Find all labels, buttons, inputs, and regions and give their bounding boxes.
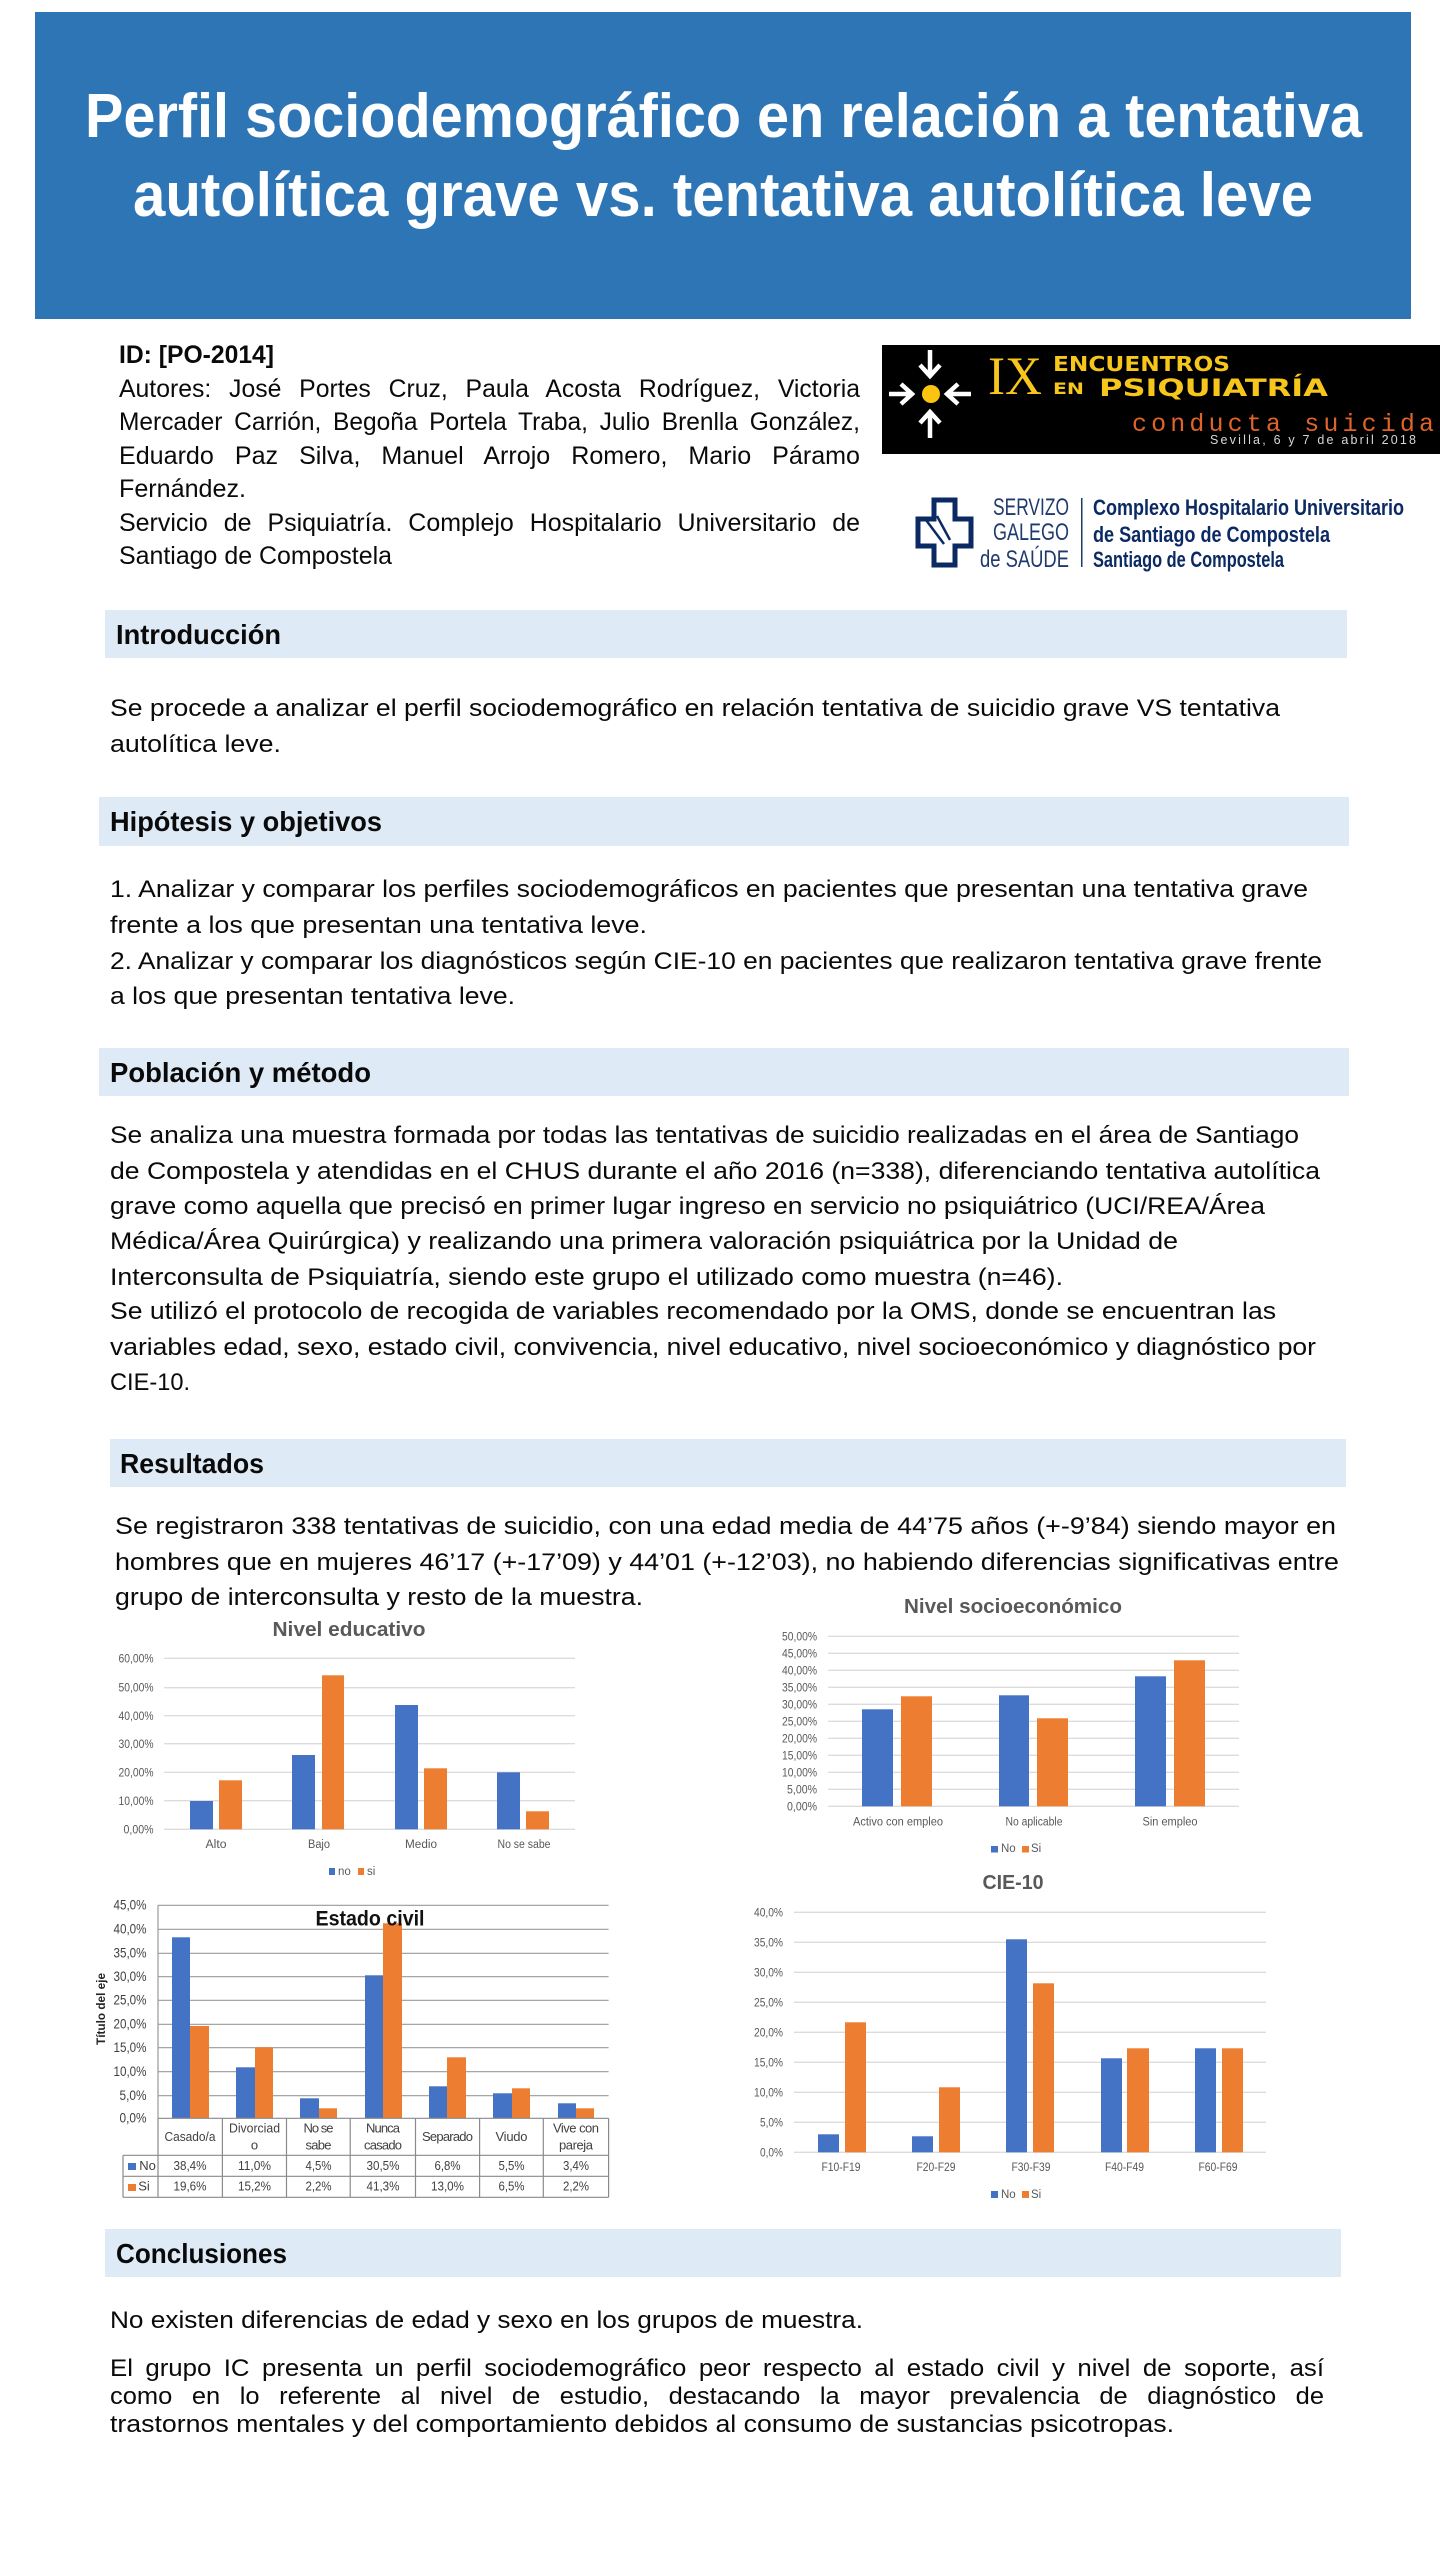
chart: nivel socioeconómico: 40,00% xyxy=(782,1666,817,1678)
panel: introducción: Introducción xyxy=(116,619,281,650)
chart: nivel educativo: 40,00% xyxy=(118,1711,154,1723)
chart: nivel educativo: 50,00% xyxy=(118,1682,154,1694)
chart: nivel educativo xyxy=(118,1619,575,1878)
title banner xyxy=(35,12,1411,319)
panel: población y método: Se analiza una muestra formada por todas las tentativas de suicidio realizadas en el área de Santiago xyxy=(110,1122,1299,1149)
chart: nivel socioeconómico: 35,00% xyxy=(782,1682,817,1694)
data table: Viudo xyxy=(496,2129,528,2144)
data table xyxy=(123,2118,609,2197)
panel: población y método: Médica/Área Quirúrgica) y realizando una primera valoración psiquiátrica por la Unidad de xyxy=(110,1228,1178,1255)
chart: CIE-10: 20,0% xyxy=(754,2028,783,2040)
data table: 6,5% xyxy=(498,2179,525,2194)
icon: converging arrows xyxy=(889,350,971,438)
chart: nivel educativo: Medio xyxy=(405,1839,437,1851)
data table: 2,2% xyxy=(306,2179,332,2194)
panel: conclusiones: Conclusiones xyxy=(116,2238,287,2269)
logo: IX Encuentros en Psiquiatría: conducta suicida xyxy=(1132,410,1434,439)
chart: nivel educativo: No se sabe xyxy=(498,1839,550,1851)
data table: 4,5% xyxy=(306,2158,332,2173)
chart: nivel socioeconómico: 50,00% xyxy=(782,1632,817,1644)
chart: estado civil: 0,0% xyxy=(120,2110,146,2126)
data table: 3,4% xyxy=(563,2158,589,2173)
data table: 13,0% xyxy=(431,2179,464,2194)
chart: estado civil: Estado civil xyxy=(316,1908,424,1931)
data table: 15,2% xyxy=(238,2179,271,2194)
panel: hipótesis y objetivos: a los que presentan tentativa leve. xyxy=(110,983,515,1010)
panel: hipótesis y objetivos: frente a los que presentan una tentativa leve. xyxy=(110,912,647,939)
logo: IX Encuentros en Psiquiatría xyxy=(882,345,1440,454)
panel: resultados: Resultados xyxy=(120,1448,264,1479)
data table: Nunca xyxy=(366,2120,401,2135)
panel: resultados xyxy=(110,1439,1346,1611)
data table: o xyxy=(251,2138,258,2153)
data table: Divorciad xyxy=(229,2120,280,2135)
data table: Vive con xyxy=(553,2120,599,2135)
chart: nivel socioeconómico: Si xyxy=(1031,1843,1041,1855)
panel: población y método: grave como aquella que precisó en primer lugar ingreso en servicio no psiquiátrico (UCI/REA/Área xyxy=(110,1193,1265,1220)
bars xyxy=(172,1923,594,2118)
data table: 6,8% xyxy=(434,2158,461,2173)
chart: nivel socioeconómico: Sin empleo xyxy=(1142,1817,1198,1829)
chart: nivel educativo: Nivel educativo xyxy=(272,1619,426,1641)
chart: estado civil: 40,0% xyxy=(114,1922,146,1936)
chart: nivel educativo: Alto xyxy=(206,1839,226,1851)
panel: introducción xyxy=(105,610,1347,758)
chart: CIE-10: F10-F19 xyxy=(822,2162,860,2174)
panel: población y método: de Compostela y atendidas en el CHUS durante el año 2016 (n=338), diferenciando tentativa autolítica xyxy=(110,1158,1320,1185)
title banner: autolítica grave vs. tentativa autolítica leve xyxy=(133,161,1313,230)
data table: No se xyxy=(304,2120,334,2135)
bars xyxy=(190,1675,549,1829)
logo: Servizo Galego de Saúde / CHUS xyxy=(918,494,1404,573)
chart: CIE-10: F20-F29 xyxy=(916,2162,956,2174)
chart: estado civil: 10,0% xyxy=(114,2064,146,2079)
chart: nivel socioeconómico: 20,00% xyxy=(782,1734,817,1746)
chart: estado civil xyxy=(94,1898,609,2197)
icon: cross xyxy=(918,500,971,565)
authors block: Santiago de Compostela xyxy=(119,542,392,570)
chart: nivel educativo: Bajo xyxy=(308,1839,330,1851)
data table: 5,5% xyxy=(498,2158,525,2173)
data table: 2,2% xyxy=(563,2179,589,2194)
chart: nivel socioeconómico: 25,00% xyxy=(782,1716,817,1728)
chart: nivel educativo: 30,00% xyxy=(118,1739,154,1751)
logo: Servizo Galego de Saúde / CHUS: de Santiago de Compostela xyxy=(1093,522,1330,547)
panel: resultados: hombres que en mujeres 46’17 (+-17’09) y 44’01 (+-12’03), no habiendo diferencias significativas entre xyxy=(115,1549,1339,1576)
panel: población y método: CIE-10. xyxy=(110,1369,190,1396)
data table: No xyxy=(139,2158,156,2173)
chart: nivel socioeconómico: 45,00% xyxy=(782,1648,817,1660)
chart: estado civil: 20,0% xyxy=(114,2016,146,2032)
bars xyxy=(818,1939,1243,2152)
chart: nivel educativo: no xyxy=(338,1866,351,1878)
authors block: ID: [PO-2014] xyxy=(119,341,274,369)
chart: CIE-10: 40,0% xyxy=(754,1908,783,1920)
logo: Servizo Galego de Saúde / CHUS: SERVIZO xyxy=(993,494,1069,521)
logo: IX Encuentros en Psiquiatría: IX xyxy=(988,346,1042,406)
chart: CIE-10: F40-F49 xyxy=(1105,2162,1144,2174)
chart: nivel socioeconómico xyxy=(782,1596,1239,1855)
chart: CIE-10: 25,0% xyxy=(754,1998,783,2010)
chart: nivel educativo: 60,00% xyxy=(118,1654,154,1666)
chart: nivel socioeconómico: No aplicable xyxy=(1006,1817,1062,1829)
panel: población y método xyxy=(99,1048,1349,1396)
chart: nivel socioeconómico: 10,00% xyxy=(782,1768,817,1780)
authors block: Autores: José Portes Cruz, Paula Acosta Rodríguez, Victoria xyxy=(119,375,860,403)
bars xyxy=(862,1660,1205,1806)
data table: casado xyxy=(364,2138,402,2153)
chart: CIE-10: No xyxy=(1001,2189,1016,2201)
logo: Servizo Galego de Saúde / CHUS: GALEGO xyxy=(993,519,1069,546)
chart: nivel socioeconómico: 5,00% xyxy=(787,1784,817,1796)
panel: hipótesis y objetivos xyxy=(99,797,1349,1010)
logo: IX Encuentros en Psiquiatría: Sevilla, 6 y 7 de abril 2018 xyxy=(1210,433,1416,447)
chart: nivel educativo: 0,00% xyxy=(124,1824,154,1836)
data table: Casado/a xyxy=(164,2129,216,2144)
panel: conclusiones xyxy=(105,2229,1341,2438)
logo: Servizo Galego de Saúde / CHUS: Santiago de Compostela xyxy=(1093,547,1284,572)
logo: IX Encuentros en Psiquiatría: ENCUENTROS xyxy=(1053,352,1230,376)
panel: introducción: autolítica leve. xyxy=(110,731,281,758)
logo: Servizo Galego de Saúde / CHUS: de SAÚDE xyxy=(980,546,1069,573)
panel: hipótesis y objetivos: 2. Analizar y comparar los diagnósticos según CIE-10 en pacientes que realizaron tentativa grave frente xyxy=(110,948,1322,975)
chart: nivel educativo: 10,00% xyxy=(118,1796,154,1808)
chart: estado civil: Título del eje xyxy=(94,1973,108,2045)
panel: conclusiones: trastornos mentales y del comportamiento debidos al consumo de sustancias psicotropas. xyxy=(110,2411,1174,2438)
chart: nivel socioeconómico: Nivel socioeconómico xyxy=(904,1596,1122,1618)
data table: Separado xyxy=(422,2129,473,2144)
chart: CIE-10: F30-F39 xyxy=(1012,2162,1050,2174)
authors block: Eduardo Paz Silva, Manuel Arrojo Romero, Mario Páramo xyxy=(119,442,860,470)
chart: CIE-10: F60-F69 xyxy=(1198,2162,1238,2174)
data table: 30,5% xyxy=(366,2158,400,2173)
data table: 19,6% xyxy=(174,2179,207,2194)
chart: nivel educativo: 20,00% xyxy=(118,1768,154,1780)
chart: nivel socioeconómico: Activo con empleo xyxy=(853,1817,943,1829)
panel: población y método: Población y método xyxy=(110,1057,371,1088)
authors block: Servicio de Psiquiatría. Complejo Hospitalario Universitario de xyxy=(119,509,860,537)
chart: CIE-10: Si xyxy=(1031,2189,1041,2201)
authors block xyxy=(119,341,860,570)
authors block: Mercader Carrión, Begoña Portela Traba, Julio Brenlla González, xyxy=(119,408,860,436)
panel: conclusiones: No existen diferencias de edad y sexo en los grupos de muestra. xyxy=(110,2307,863,2334)
logo: IX Encuentros en Psiquiatría: EN xyxy=(1053,379,1084,398)
chart: estado civil: 15,0% xyxy=(114,2040,146,2055)
chart: nivel socioeconómico: 15,00% xyxy=(782,1750,817,1762)
chart: estado civil: 5,0% xyxy=(120,2088,146,2103)
chart: CIE-10: 15,0% xyxy=(754,2058,783,2070)
chart: estado civil: 30,0% xyxy=(114,1969,146,1984)
chart: CIE-10: 5,0% xyxy=(760,2118,783,2130)
chart: estado civil: 25,0% xyxy=(114,1992,146,2008)
chart: estado civil: 45,0% xyxy=(114,1898,146,1912)
chart: nivel socioeconómico: No xyxy=(1001,1843,1016,1855)
panel: resultados: Se registraron 338 tentativas de suicidio, con una edad media de 44’75 años (+-9’84) siendo mayor en xyxy=(115,1513,1336,1540)
chart: CIE-10: 30,0% xyxy=(754,1968,783,1980)
chart: CIE-10: 10,0% xyxy=(754,2088,783,2100)
data table: pareja xyxy=(559,2138,594,2153)
chart: nivel socioeconómico: 30,00% xyxy=(782,1700,817,1712)
title banner: Perfil sociodemográfico en relación a tentativa xyxy=(85,82,1362,151)
panel: resultados: grupo de interconsulta y resto de la muestra. xyxy=(115,1584,643,1611)
panel: conclusiones: El grupo IC presenta un perfil sociodemográfico peor respecto al estado civil y nivel de soporte, así xyxy=(110,2355,1324,2382)
panel: hipótesis y objetivos: Hipótesis y objetivos xyxy=(110,806,382,837)
data table: 41,3% xyxy=(366,2179,400,2194)
panel: población y método: variables edad, sexo, estado civil, convivencia, nivel educativo, nivel socioeconómico y diagnóstico por xyxy=(110,1334,1316,1361)
chart: CIE-10: 0,0% xyxy=(760,2148,783,2160)
data table: sabe xyxy=(306,2138,332,2153)
panel: introducción: Se procede a analizar el perfil sociodemográfico en relación tentativa de suicidio grave VS tentativa xyxy=(110,695,1280,722)
panel: conclusiones: como en lo referente al nivel de estudio, destacando la mayor prevalencia de diagnóstico de xyxy=(110,2383,1324,2410)
logo: IX Encuentros en Psiquiatría: PSIQUIATRÍA xyxy=(1099,373,1329,402)
chart: CIE-10: CIE-10 xyxy=(982,1872,1044,1894)
data table: Si xyxy=(138,2179,150,2194)
chart: CIE-10 xyxy=(754,1872,1266,2201)
chart: nivel socioeconómico: 0,00% xyxy=(787,1802,817,1814)
panel: población y método: Interconsulta de Psiquiatría, siendo este grupo el utilizado como muestra (n=46). xyxy=(110,1264,1063,1291)
chart: CIE-10: 35,0% xyxy=(754,1938,783,1950)
authors block: Fernández. xyxy=(119,475,246,503)
chart: estado civil: 35,0% xyxy=(114,1946,146,1960)
data table: 38,4% xyxy=(174,2158,207,2173)
panel: población y método: Se utilizó el protocolo de recogida de variables recomendado por la OMS, donde se encuentran las xyxy=(110,1298,1276,1325)
chart: nivel educativo: si xyxy=(367,1866,375,1878)
data table: 11,0% xyxy=(238,2158,271,2173)
panel: hipótesis y objetivos: 1. Analizar y comparar los perfiles sociodemográficos en pacientes que presentan una tentativa grave xyxy=(110,876,1308,903)
